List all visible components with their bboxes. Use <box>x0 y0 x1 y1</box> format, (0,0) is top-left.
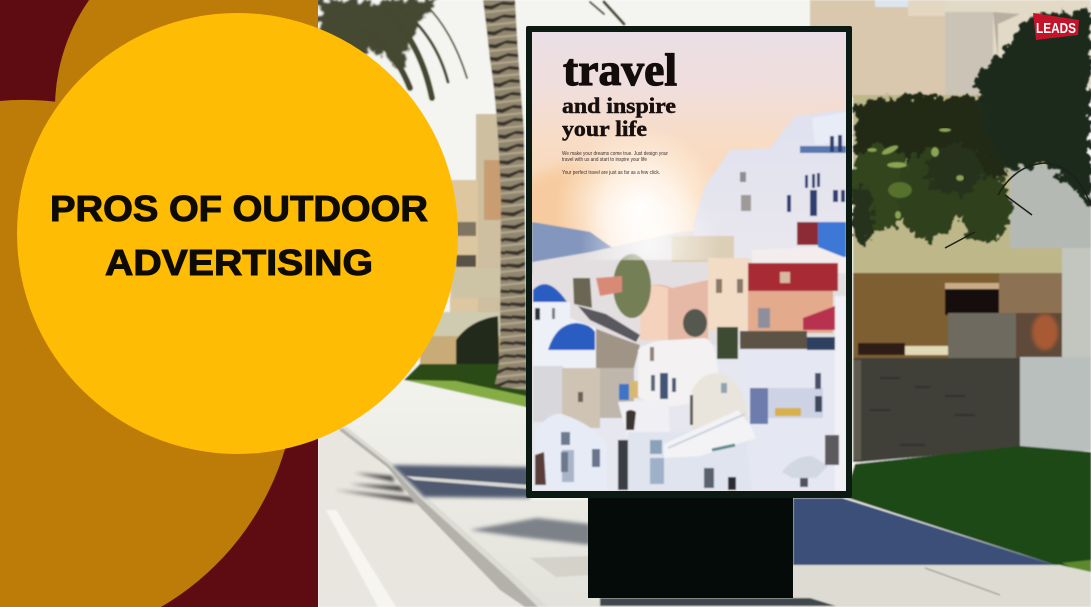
blue dome two <box>548 323 595 350</box>
umbrella <box>782 456 828 478</box>
white church body <box>533 318 596 368</box>
salmon wall <box>748 291 833 333</box>
billboard frame <box>526 26 852 498</box>
shaded porch <box>853 273 1062 358</box>
tree: tall right canopy <box>975 8 1091 208</box>
shrubs <box>717 327 738 359</box>
blue and yellow barrels <box>619 384 629 400</box>
billboard screen <box>510 32 846 491</box>
peach house <box>708 258 750 330</box>
billboard <box>510 26 852 598</box>
blue dome one <box>533 284 567 302</box>
right building wall <box>810 0 945 97</box>
stone block <box>948 313 1016 358</box>
road shadows <box>335 473 418 503</box>
concrete column <box>1062 248 1091 358</box>
lower right white block <box>806 348 836 357</box>
road <box>318 428 533 607</box>
red band <box>748 263 838 291</box>
mustard circle bottom <box>0 100 296 607</box>
billboard stand <box>588 494 793 598</box>
crowd <box>578 306 640 342</box>
trees right <box>848 8 1091 248</box>
paving slab <box>530 556 590 577</box>
title text: ADVERTISING <box>105 242 373 283</box>
roof red and blue <box>818 222 846 257</box>
pink awning <box>803 306 835 330</box>
person <box>728 477 736 490</box>
logo badge: LEADS <box>1036 20 1076 37</box>
lawn <box>845 446 1091 572</box>
poster body copy: Your perfect travel are just as far as a few click. <box>562 170 660 176</box>
dark deck <box>806 336 836 351</box>
sidewalk <box>343 380 793 607</box>
poster subhead line two: your life <box>562 116 647 141</box>
yellow title circle <box>17 13 458 454</box>
pink house <box>651 280 709 340</box>
beige blocks <box>533 366 563 422</box>
tree: low spreading canopy <box>848 96 1011 245</box>
bottom central block <box>628 432 746 446</box>
mustard circle top <box>55 0 318 296</box>
title text <box>50 188 428 283</box>
railing <box>858 343 905 355</box>
palm fronds <box>318 0 624 98</box>
arched white house <box>692 373 748 445</box>
terrace <box>618 400 668 432</box>
tree highlights <box>867 128 964 219</box>
logo badge <box>1033 13 1079 40</box>
street scene background <box>318 0 1091 607</box>
title text: PROS OF OUTDOOR <box>50 188 428 229</box>
poster body copy <box>562 151 668 176</box>
road lane line <box>326 510 396 607</box>
branches <box>945 163 1091 248</box>
hedge <box>456 316 500 384</box>
right white column <box>835 296 846 491</box>
poster photo: hillside village <box>532 110 846 491</box>
grass strip <box>404 364 530 408</box>
palm trunk <box>483 0 527 390</box>
white awnings <box>664 410 756 458</box>
distant buildings left of billboard <box>420 114 502 365</box>
left arched house <box>544 414 591 430</box>
poster photo: hills <box>532 222 612 275</box>
brick wall <box>853 358 1020 462</box>
olive wall behind trees <box>853 95 1062 273</box>
stand shadow <box>600 598 836 606</box>
frond shadow on pavement <box>470 518 590 545</box>
poster body copy: We make your dreams come true. Just design your <box>562 151 668 157</box>
pavement blue shadow right <box>793 498 1055 565</box>
round dark tree <box>683 309 707 337</box>
village underlay <box>532 231 846 346</box>
grey curved wall <box>594 328 640 368</box>
left colour panel <box>0 0 318 607</box>
poster headline: travel: travel <box>563 44 677 95</box>
poster subhead line one: and inspire <box>562 93 676 118</box>
curb <box>339 426 547 607</box>
green tree <box>613 254 651 318</box>
sidewalk blue shadow <box>392 465 530 498</box>
grey upper box <box>1010 165 1091 248</box>
poster body copy: travel with us and start to inspire your life <box>562 157 647 163</box>
white roof <box>752 247 846 273</box>
pavement right <box>793 565 1091 607</box>
central white house <box>638 338 718 408</box>
light panel wall <box>1020 357 1091 451</box>
